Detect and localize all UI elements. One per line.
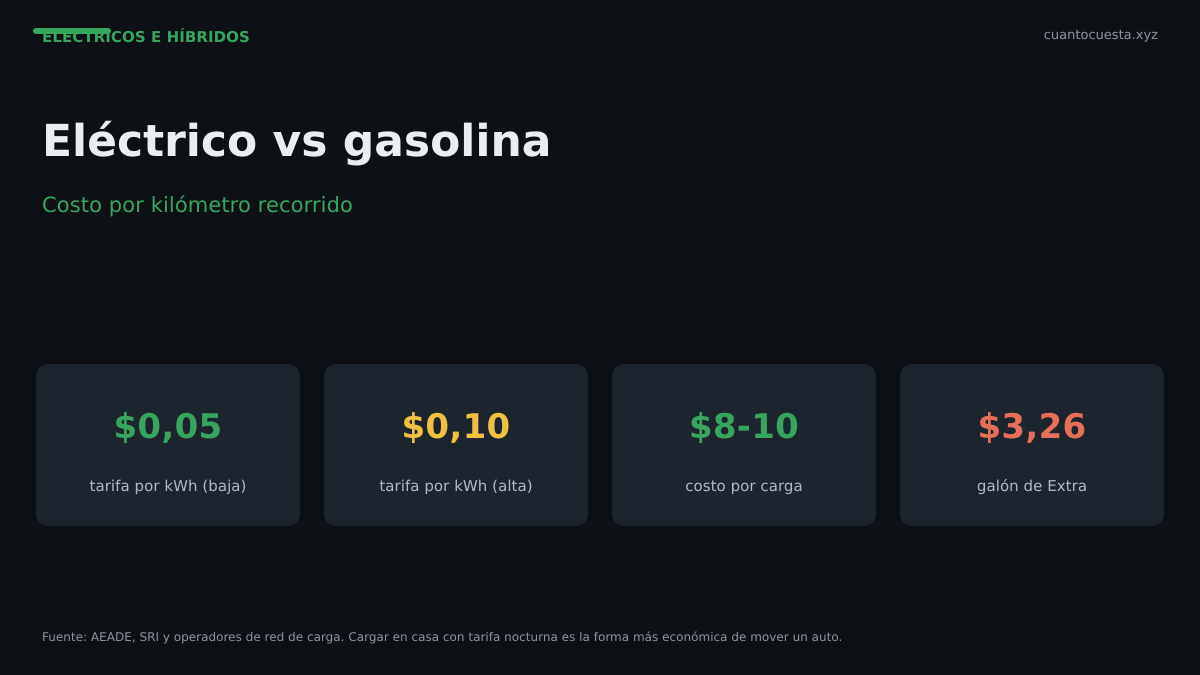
value: $3,26 [977,407,1087,447]
value: $8-10 [689,407,799,447]
card: tarifa alta [324,364,588,526]
value: $0,10 [401,407,511,447]
caption: tarifa por kWh (alta) [379,477,533,495]
source note: Fuente: AEADE, SRI y operadores de red de carga. Cargar en casa con tarifa nocturna es la forma más económica de mover un auto. [42,630,842,644]
card: tarifa baja [36,364,300,526]
card: costo por carga [612,364,876,526]
site name: cuantocuesta.xyz [1044,28,1158,43]
category label: ELÉCTRICOS E HÍBRIDOS [42,28,250,46]
caption: tarifa por kWh (baja) [90,477,246,495]
title: Eléctrico vs gasolina [42,116,551,167]
value: $0,05 [113,407,223,447]
caption: galón de Extra [977,477,1087,495]
subtitle: Costo por kilómetro recorrido [42,193,353,217]
card: galón de Extra [900,364,1164,526]
accent bar [33,28,111,34]
caption: costo por carga [685,477,803,495]
